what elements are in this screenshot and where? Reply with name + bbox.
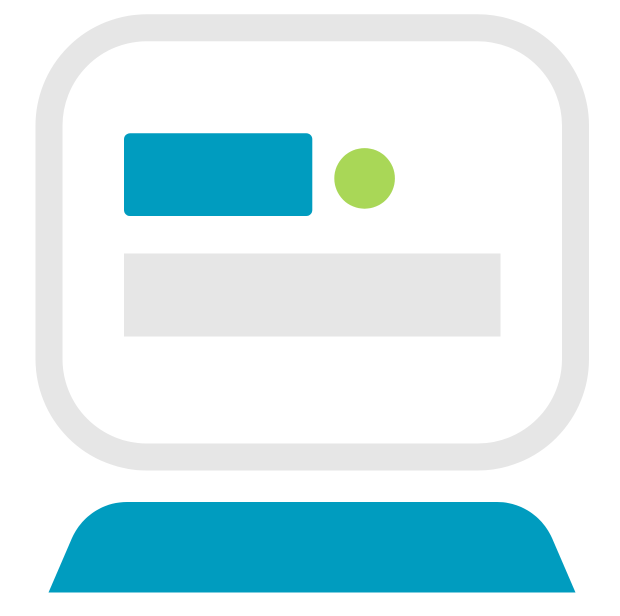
gray bar [124, 254, 500, 336]
blue monitor base [48, 502, 576, 592]
green circle [334, 148, 395, 209]
monitor frame [49, 28, 576, 457]
blue screen block [124, 133, 312, 216]
